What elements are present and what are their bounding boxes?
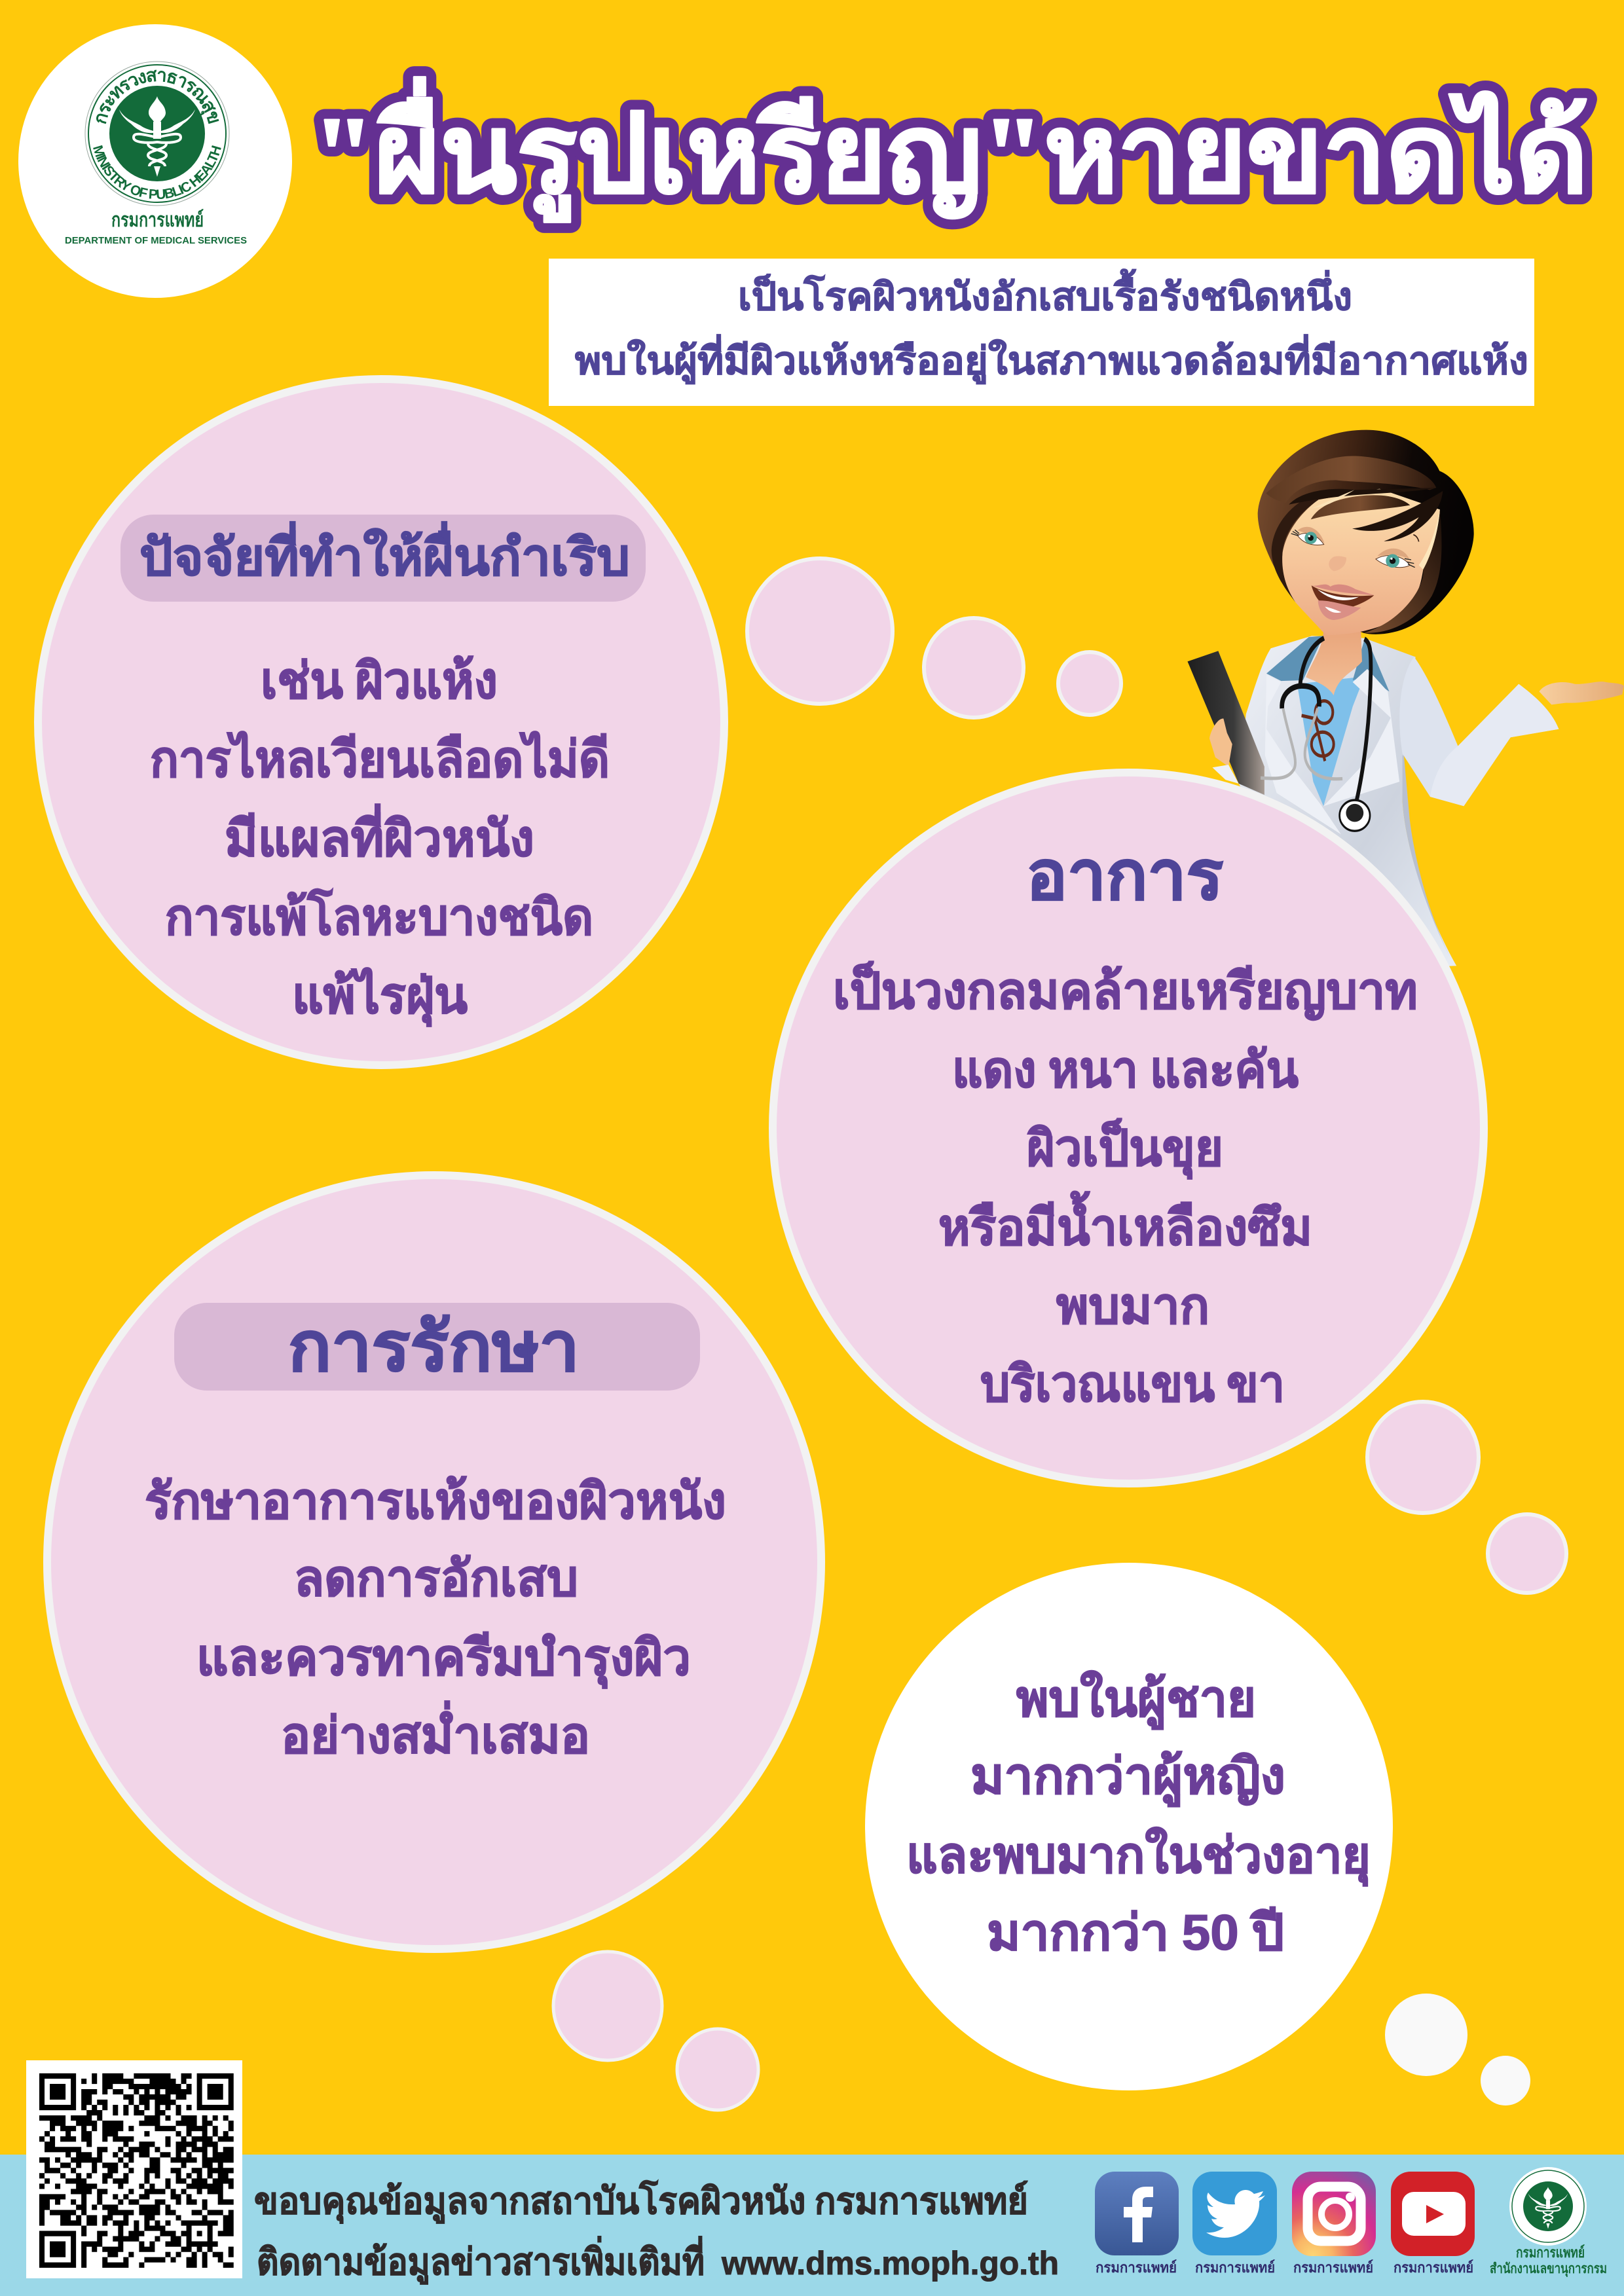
nose [1329, 556, 1346, 571]
text: factors list: แพ้ไรฝุ่น [292, 967, 468, 1027]
text: symptoms list: เป็นวงกลมคล้ายเหรียญบาท [833, 961, 1418, 1021]
icon: twitter: กรมการแพทย์ [1195, 2259, 1275, 2276]
text: symptoms list: บริเวณแขน ขา [980, 1357, 1285, 1412]
text: factors list: การแพ้โลหะบางชนิด [165, 888, 593, 945]
logo: department of medical services [18, 24, 292, 298]
panel: aggravating factors [38, 379, 724, 1065]
logo: department of medical services: กระทรวงสาธารณสุข [96, 69, 219, 124]
heading: factors: ปัจจัยที่ทำให้ผื่นกำเริบ [139, 521, 630, 586]
intro text box [549, 259, 1534, 406]
text: symptoms list: หรือมีน้ำเหลืองซึม [938, 1191, 1312, 1256]
heading: factors [120, 515, 646, 602]
text: prevalence: และพบมากในช่วงอายุ [906, 1827, 1371, 1887]
text: prevalence: มากกว่า 50 ปี [987, 1905, 1284, 1961]
text: treatment list: และควรทาครีมบำรุงผิว [196, 1631, 691, 1689]
doctor body [1187, 631, 1624, 970]
small thought bubbles: causes [747, 558, 1121, 718]
panel: treatment [47, 1175, 821, 1949]
icon: instagram: กรมการแพทย์ [1293, 2259, 1373, 2276]
logo: department of medical services: MINISTRY OF PUBLIC HEALTH [93, 145, 221, 199]
text: factors list: เช่น ผิวแห้ง [261, 654, 498, 709]
small thought bubbles: treatment [553, 1952, 758, 2110]
text: prevalence [906, 1670, 1371, 1961]
text: factors list [150, 654, 610, 1027]
logo: department of medical services: กรมการแพทย์ [111, 209, 204, 231]
icon: instagram [1292, 2172, 1376, 2276]
footer credits text [254, 2179, 1059, 2285]
right eye [1376, 549, 1415, 568]
intro text box: เป็นโรคผิวหนังอักเสบเรื้อรังชนิดหนึ่ง [738, 269, 1352, 318]
logo: secretariat office: กรมการแพทย์ [1516, 2244, 1585, 2261]
footer credits text: ขอบคุณข้อมูลจากสถาบันโรคผิวหนัง กรมการแพทย์ [254, 2179, 1028, 2224]
text: prevalence: มากกว่าผู้หญิง [970, 1749, 1285, 1807]
icon: facebook [1095, 2172, 1179, 2276]
illustration: doctor [1187, 430, 1624, 970]
text: prevalence: พบในผู้ชาย [1016, 1670, 1256, 1730]
text: treatment list: ลดการอักเสบ [294, 1552, 578, 1607]
text: factors list: การไหลเวียนเลือดไม่ดี [150, 731, 610, 788]
icon: twitter [1192, 2172, 1277, 2276]
text: treatment list: รักษาอาการแห้งของผิวหนัง [145, 1474, 726, 1529]
text: symptoms list: พบมาก [1056, 1279, 1209, 1334]
small thought bubbles: prevalence [1385, 1994, 1530, 2105]
heading: symptoms: อาการ [1026, 839, 1223, 914]
footer credits text: ติดตามข้อมูลข่าวสารเพิ่มเติมที่ [257, 2236, 705, 2285]
text: symptoms list [833, 961, 1418, 1412]
panel: symptoms [773, 773, 1484, 1484]
icon: youtube: กรมการแพทย์ [1393, 2259, 1473, 2276]
heading: treatment [174, 1303, 700, 1391]
intro text box: พบในผู้ที่มีผิวแห้งหรืออยู่ในสภาพแวดล้อมที่มีอากาศแห้ง [575, 334, 1528, 384]
mouth [1312, 585, 1375, 620]
panel: prevalence [865, 1563, 1393, 2090]
title: "ผื่นรูปเหรียญ"หายขาดได้ [312, 77, 1588, 223]
footer bar [0, 2155, 1624, 2296]
text: factors list: มีแผลที่ผิวหนัง [225, 803, 534, 867]
logo: secretariat office [1490, 2167, 1607, 2278]
icon: youtube [1391, 2172, 1475, 2276]
text: symptoms list: แดง หนา และคัน [952, 1043, 1299, 1098]
heading: treatment: การรักษา [288, 1310, 580, 1385]
text: treatment list [145, 1474, 726, 1764]
doctor head [1258, 430, 1474, 635]
small thought bubbles: symptoms [1367, 1402, 1566, 1593]
footer credits text: www.dms.moph.go.th [721, 2245, 1059, 2282]
left eye [1291, 527, 1325, 545]
text: symptoms list: ผิวเป็นขุย [1027, 1118, 1223, 1180]
icon: facebook: กรมการแพทย์ [1096, 2259, 1177, 2276]
text: treatment list: อย่างสม่ำเสมอ [281, 1700, 590, 1764]
title: "ผื่นรูปเหรียญ"หายขาดได้ [312, 77, 1588, 223]
QR code [26, 2060, 242, 2278]
logo: department of medical services: DEPARTMENT OF MEDICAL SERVICES [65, 235, 247, 246]
